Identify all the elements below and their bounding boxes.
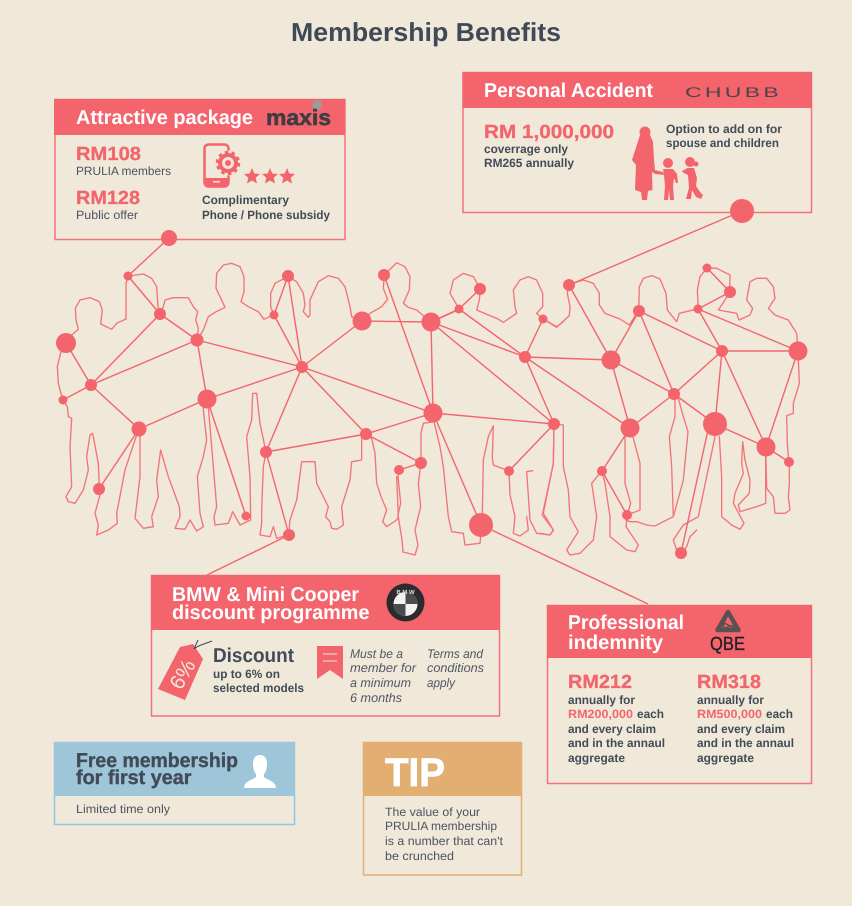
text: discount [213,645,304,695]
column: RM318: RM318 [697,672,761,693]
panel: attractive package [54,99,345,246]
text: discount: selected models [213,681,304,695]
column: RM212: RM200,000 [568,707,633,721]
icon: 6% price tag: 6% [165,656,201,694]
heading: free membership: for first year [76,767,192,789]
text: complimentary phone: Complimentary [202,193,289,207]
logo: QBE: QBE [710,634,745,655]
icon: mother and children [632,126,703,200]
column: RM318: RM500,000 [697,707,762,721]
text: tip body: be crunched [385,849,454,863]
heading: BMW discount programme: discount programme [172,602,370,624]
silhouette outlines, centre [288,263,563,555]
heading: professional indemnity: indemnity [568,632,664,654]
column: RM318: aggregate [697,751,754,765]
text: option to add on [666,122,782,150]
text: membership requirement: 6 months [350,691,402,705]
text: terms and conditions: conditions [427,661,484,675]
price: RM 1,000,000: RM 1,000,000 [484,122,614,143]
title: Membership Benefits [291,17,561,47]
icon: 6% price tag [158,640,212,700]
panel: BMW and Mini Cooper [151,575,500,716]
network of people silhouettes [56,211,808,604]
price: RM128: RM128 [76,188,140,209]
text: coverage price: RM265 annually [484,156,574,170]
heading: personal accident: Personal Accident [484,80,653,102]
icon: bookmark [317,646,343,679]
heading: professional indemnity [568,612,684,654]
column: RM318: and in the annaul [697,736,794,750]
logo: QBE [710,612,745,655]
text: tip body: The value of your [385,805,480,819]
network links [63,211,798,604]
text: discount: Discount [213,645,294,667]
text: terms and conditions [427,647,484,690]
text: complimentary phone [202,193,330,222]
heading: TIP: TIP [385,751,445,795]
text: tip body: PRULIA membership [385,819,497,833]
column: RM212: RM212 [568,672,632,693]
text: limited time only: Limited time only [76,802,170,816]
text: terms and conditions: apply [427,676,456,690]
text: membership requirement: a minimum [350,676,411,690]
column: RM212: aggregate [568,751,625,765]
silhouette outlines, left [57,263,289,538]
text: complimentary phone: Phone / Phone subsidy [202,208,330,222]
column: RM318 [697,672,794,765]
logo: chubb: CHUBB [685,84,782,100]
panel: personal accident [462,72,812,223]
heading: BMW discount programme [172,584,370,624]
column: RM318: annually for [697,693,764,707]
text: discount: up to 6% on [213,667,280,681]
heading: free membership [76,750,238,789]
label: public offer: Public offer [76,208,138,222]
text: membership requirement [350,647,417,705]
column: RM212 [568,672,665,765]
heading: attractive package: Attractive package [76,107,253,129]
text: option to add on: spouse and children [666,136,779,150]
heading: free membership: Free membership [76,750,238,772]
panel: tip [363,742,522,875]
panel: free membership [54,742,295,824]
text: tip body: is a number that can't [385,834,504,848]
price: RM108: RM108 [76,144,141,165]
icon: person [244,755,276,788]
connector node [730,199,754,223]
column: RM212: annually for [568,693,635,707]
network nodes [56,264,808,559]
label: PRULIA members: PRULIA members [76,164,171,178]
column: RM212: each [637,707,664,721]
text: tip body [385,805,504,863]
column: RM212: and every claim [568,722,656,736]
text: option to add on: Option to add on for [666,122,782,136]
text: coverage price [484,142,574,170]
heading: professional indemnity: Professional [568,612,684,634]
icon: three stars [244,168,295,184]
silhouette outlines, right [540,268,799,555]
logo: maxis: maxis [266,105,331,130]
text: membership requirement: member for [350,661,417,675]
text: terms and conditions: Terms and [427,647,484,661]
column: RM318: each [766,707,793,721]
panel: professional indemnity [547,605,812,784]
logo: BMW roundel: B M W [396,589,415,596]
icon: phone with gear [204,144,240,186]
text: membership requirement: Must be a [350,647,403,661]
connector node [161,230,177,246]
heading: BMW discount programme: BMW & Mini Cooper [172,584,359,606]
column: RM318: and every claim [697,722,785,736]
column: RM212: and in the annaul [568,736,665,750]
logo: BMW roundel [386,584,424,622]
text: coverage price: coverrage only [484,142,568,156]
